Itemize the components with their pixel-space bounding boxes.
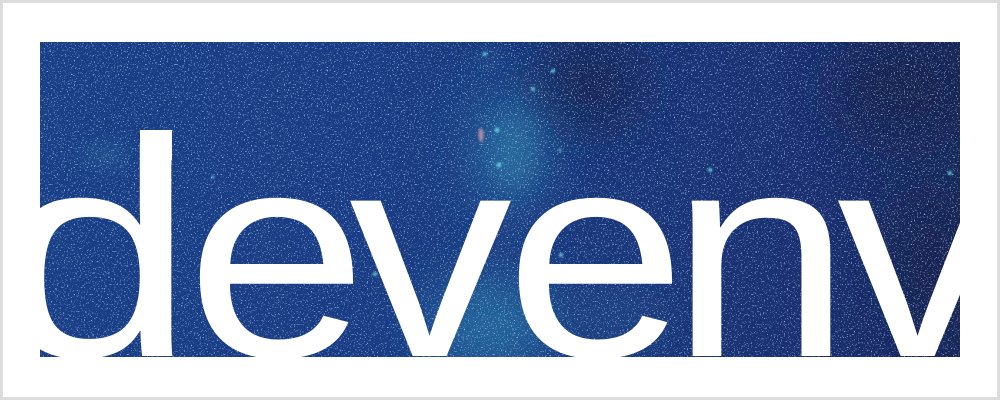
milky way glow	[428, 85, 660, 373]
bright stars	[212, 52, 952, 276]
nebula clouds	[87, 112, 540, 188]
dark sky regions	[535, 40, 970, 330]
title: devenv	[40, 130, 960, 357]
star field	[40, 42, 960, 357]
night sky photo	[40, 40, 970, 373]
pink nebula	[478, 128, 484, 142]
